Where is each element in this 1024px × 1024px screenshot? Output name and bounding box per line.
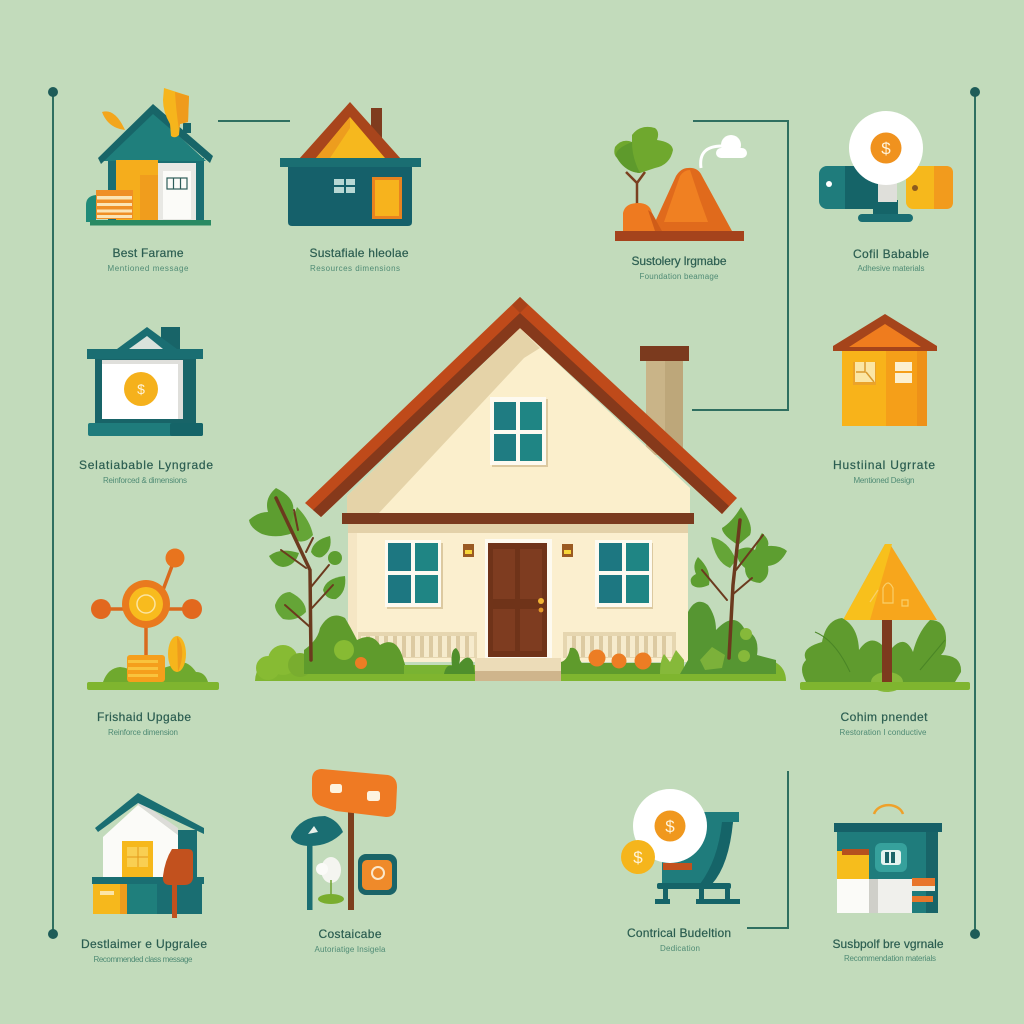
eave band xyxy=(342,513,694,524)
icon: chair with dollar coins xyxy=(621,789,740,904)
left tree xyxy=(249,488,345,660)
icon: framed house with coin xyxy=(87,327,203,436)
icon: chair with dollar coins: $ xyxy=(633,848,643,867)
label: Susbpolf bre vgrnale xyxy=(832,937,944,951)
icon: teal house with yellow flag xyxy=(86,88,213,226)
icon: monitor with dollar coin xyxy=(819,111,953,222)
connector: bottom right xyxy=(747,771,788,928)
label: Cofil Babable xyxy=(853,247,929,261)
front steps xyxy=(475,658,561,681)
panel: Susbpolf bre vgrnale xyxy=(832,805,944,963)
panel: Selatiabable Lyngrade xyxy=(79,327,213,485)
panel: Contrical Budeltion xyxy=(621,789,740,953)
label: Destlaimer e Upgralee xyxy=(81,937,207,951)
label: Hustiinal Ugrrate xyxy=(833,458,935,472)
wall lamps xyxy=(463,544,573,557)
sublabel: Mentioned Design xyxy=(854,476,914,485)
right porch railing xyxy=(563,632,676,658)
label: Contrical Budeltion xyxy=(627,926,731,940)
sublabel: Recommended class message xyxy=(94,955,193,964)
icon: yellow triangle sign with bushes xyxy=(800,544,970,692)
label: Cohim pnendet xyxy=(840,710,928,724)
icon: yellow house xyxy=(833,314,937,426)
right tree xyxy=(691,507,787,658)
label: Costaicabe xyxy=(318,927,382,941)
icon: framed house with coin: $ xyxy=(137,381,145,397)
connector: top left xyxy=(218,120,290,122)
label: Frishaid Upgabe xyxy=(97,710,191,724)
wall xyxy=(348,524,688,662)
sublabel: Reinforce dimension xyxy=(108,728,178,737)
icon: house with paddle xyxy=(92,793,204,918)
left window xyxy=(385,540,443,609)
left timeline rail xyxy=(48,87,58,939)
icon: teal storefront box xyxy=(834,805,942,913)
icon: signposts and flower xyxy=(291,769,397,910)
icon: coin network on stack xyxy=(87,548,219,690)
sublabel: Dedication xyxy=(660,944,700,953)
panel: Hustiinal Ugrrate xyxy=(833,314,937,485)
icon: chair with dollar coins: $ xyxy=(665,817,675,836)
panel: Sustolery lrgmabe xyxy=(614,127,747,281)
left shrubs xyxy=(256,616,475,680)
label: Sustafiale hleolae xyxy=(310,246,409,260)
ground strip right xyxy=(561,662,786,681)
icon: monitor with dollar coin: $ xyxy=(881,139,891,158)
sublabel: Recommendation materials xyxy=(844,954,936,963)
right timeline rail xyxy=(970,87,980,939)
right window xyxy=(595,540,653,609)
panel: Sustafiale hleolae xyxy=(280,102,421,273)
sublabel: Restoration I conductive xyxy=(840,728,927,737)
sublabel: Adhesive materials xyxy=(858,264,924,273)
label: Selatiabable Lyngrade xyxy=(79,458,213,472)
connector: top right to main house xyxy=(692,121,788,410)
roof xyxy=(305,297,737,517)
panel: Best Farame xyxy=(86,88,213,273)
ground strip left xyxy=(255,664,475,681)
right shrubs xyxy=(561,602,776,674)
label: Sustolery lrgmabe xyxy=(632,254,727,268)
icon: tree, orange hills and cloud xyxy=(614,127,747,241)
sublabel: Mentioned message xyxy=(108,264,189,273)
upper window xyxy=(490,397,548,467)
gable wall xyxy=(347,328,690,514)
sublabel: Foundation beamage xyxy=(640,272,719,281)
panel: Cofil Babable xyxy=(819,111,953,273)
icon: teal bungalow with orange door xyxy=(280,102,421,226)
left porch railing xyxy=(358,632,477,658)
front door xyxy=(485,539,552,658)
panel: Cohim pnendet xyxy=(800,544,970,737)
panel: Costaicabe xyxy=(291,769,397,954)
sublabel: Reinforced & dimensions xyxy=(103,476,187,485)
panel: Destlaimer e Upgralee xyxy=(81,793,207,964)
sublabel: Autoriatige Insigela xyxy=(314,945,386,954)
sublabel: Resources dimensions xyxy=(310,264,400,273)
central house illustration xyxy=(249,297,787,681)
chimney xyxy=(640,346,689,455)
panel: Frishaid Upgabe xyxy=(87,548,219,737)
label: Best Farame xyxy=(112,246,184,260)
